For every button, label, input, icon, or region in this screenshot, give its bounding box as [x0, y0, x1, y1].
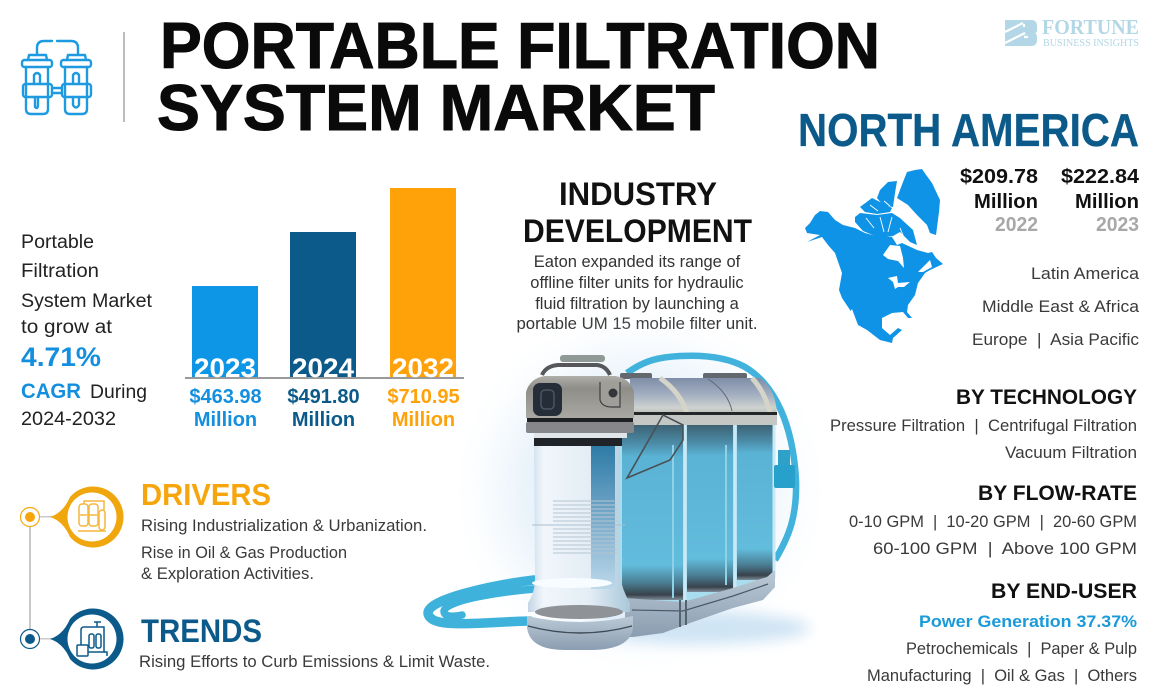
stats: 2022 value — [960, 166, 1038, 236]
text block: CAGR statement: Portable — [21, 232, 94, 253]
latch — [627, 415, 683, 478]
bar chart: 2032 — [392, 353, 454, 383]
text block: trends: Rising Efforts to Curb Emissions & Limit Waste. — [139, 652, 490, 671]
segment: by flow-rate: BY FLOW-RATE — [978, 481, 1137, 505]
bar chart: Million — [392, 409, 455, 431]
text block: CAGR statement: Filtration — [21, 261, 99, 282]
bar chart: $463.98 — [189, 386, 262, 408]
bottle jar — [528, 446, 630, 612]
text block: drivers: Rising Industrialization & Urbanization. — [141, 516, 427, 535]
stats: 2022 value: Million — [974, 191, 1038, 213]
segment: by flow-rate: 60-100 GPM | Above 100 GPM — [873, 539, 1137, 558]
text block: industry development: portable UM 15 mobile filter unit. — [516, 315, 758, 333]
text block: industry development: fluid filtration by launching a — [535, 295, 740, 313]
text block: CAGR statement: System Market — [21, 291, 153, 312]
title — [157, 9, 880, 144]
icon: trends — [20, 608, 124, 670]
stats: 2022 value: $209.78 — [960, 166, 1038, 188]
text block: industry development: offline filter units for hydraulic — [530, 274, 744, 292]
bar chart: $710.95 — [387, 386, 460, 408]
stats: 2023 value — [1061, 166, 1140, 236]
text block: drivers: Rise in Oil & Gas Production — [141, 543, 347, 562]
icon: portable filter — [22, 41, 91, 114]
bar chart: 2024 — [292, 353, 354, 383]
bar chart — [185, 188, 464, 431]
heading: drivers: DRIVERS — [141, 477, 271, 512]
stats: 2023 value: $222.84 — [1061, 166, 1140, 188]
lid — [620, 373, 652, 379]
text block: drivers: & Exploration Activities. — [141, 564, 314, 583]
text block: industry development: Eaton expanded its range of — [534, 253, 741, 271]
segment: by technology: Vacuum Filtration — [1005, 443, 1137, 462]
list: other regions: Europe | Asia Pacific — [972, 330, 1139, 349]
logo: Fortune Business Insights: FORTUNE — [1042, 15, 1139, 39]
segment: by end-user: Petrochemicals | Paper & Pulp — [906, 639, 1137, 658]
text block: CAGR statement: to grow at — [21, 317, 113, 338]
segment: by technology: BY TECHNOLOGY — [956, 385, 1137, 409]
heading: Industry Development — [523, 176, 752, 249]
list: other regions: Middle East & Africa — [982, 297, 1140, 316]
divider — [123, 32, 125, 122]
bottle base — [535, 605, 623, 619]
icon: drivers — [20, 486, 124, 547]
stats: 2023 value: Million — [1075, 191, 1139, 213]
text block: drivers — [141, 516, 427, 583]
rear tray — [625, 570, 775, 637]
heading: Industry Development: DEVELOPMENT — [523, 213, 752, 249]
bar chart: Million — [194, 409, 257, 431]
bottle head — [526, 376, 634, 418]
segment: by end-user: Power Generation 37.37% — [919, 612, 1137, 631]
image: portable filtration unit — [428, 355, 810, 650]
bar chart: Million — [292, 409, 355, 431]
bar chart: 2023 — [194, 353, 256, 383]
title: PORTABLE FILTRATION — [160, 9, 880, 82]
tanks — [620, 425, 775, 604]
bar chart: $491.80 — [287, 386, 360, 408]
segment: by end-user: Manufacturing | Oil & Gas | Others — [867, 666, 1137, 685]
drivers and trends connector — [29, 527, 31, 629]
logo: Fortune Business Insights — [1005, 15, 1139, 49]
text block: industry development — [516, 253, 758, 333]
list: other regions: Latin America — [1031, 264, 1140, 283]
logo: Fortune Business Insights: BUSINESS INSIGHTS — [1043, 38, 1139, 49]
hose coil — [428, 580, 534, 624]
text block: CAGR statement — [21, 232, 153, 430]
list: other regions — [972, 264, 1140, 349]
heading: Industry Development: INDUSTRY — [559, 176, 717, 212]
stats: 2022 value: 2022 — [995, 214, 1038, 236]
text block: CAGR statement: 2024-2032 — [21, 409, 116, 430]
text block: CAGR statement: CAGR — [21, 380, 81, 403]
title: SYSTEM MARKET — [157, 71, 715, 144]
heading: trends: TRENDS — [141, 613, 262, 649]
segment: by flow-rate: 0-10 GPM | 10-20 GPM | 20-60 GPM — [849, 512, 1137, 531]
top hose — [627, 356, 796, 560]
text block: CAGR statement: During — [90, 382, 147, 403]
segment: by end-user: BY END-USER — [991, 579, 1137, 603]
text block: CAGR statement: 4.71% — [21, 342, 101, 372]
map: North America — [805, 169, 943, 343]
stats: 2023 value: 2023 — [1096, 214, 1139, 236]
segment: by technology — [830, 385, 1137, 462]
segment: by flow-rate — [849, 481, 1137, 558]
bottle collar — [526, 422, 634, 433]
segment: by technology: Pressure Filtration | Centrifugal Filtration — [830, 416, 1137, 435]
segment: by end-user — [867, 579, 1137, 685]
hose connector — [778, 450, 790, 465]
